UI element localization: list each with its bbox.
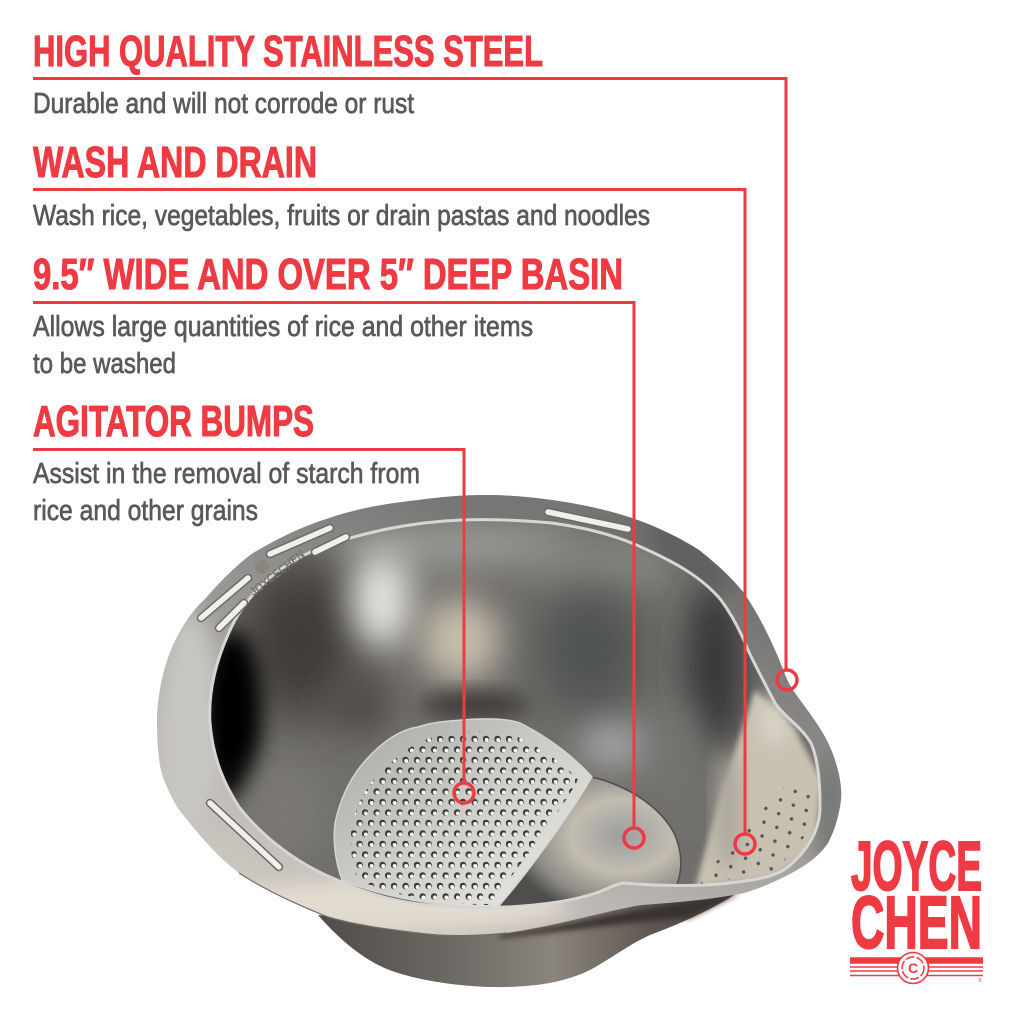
heading: HIGH QUALITY STAINLESS STEEL [33, 27, 543, 76]
description: Durable and will not corrode or rust [33, 88, 414, 120]
leader line [33, 302, 634, 828]
marker [454, 783, 474, 803]
logo stripes [850, 957, 983, 964]
marker [624, 828, 644, 848]
heading: 9.5″ WIDE AND OVER 5″ DEEP BASIN [33, 250, 623, 299]
inner rim highlight [210, 520, 820, 908]
callout 3: wide and deep basin [33, 250, 644, 848]
smooth basin lobe [498, 777, 681, 908]
description: Wash rice, vegetables, fruits or drain pastas and noodles [33, 200, 650, 232]
bowl underside [318, 888, 745, 987]
agitator bumps [351, 731, 578, 905]
heading: AGITATOR BUMPS [33, 397, 314, 446]
rim rivet [255, 560, 269, 574]
marker [735, 834, 755, 854]
rim engraving: JOYCECHEN [247, 547, 307, 599]
rim slots [201, 512, 628, 867]
callout 1: high quality stainless steel [33, 27, 797, 690]
rim edge shadow [239, 873, 507, 936]
bowl interior [200, 510, 830, 910]
spout wall [695, 690, 822, 888]
callout 2: wash and drain [33, 138, 755, 854]
agitator plate [334, 719, 592, 907]
description line 2: to be washed [33, 348, 176, 380]
leader line [33, 450, 464, 783]
description: Assist in the removal of starch from [33, 458, 420, 490]
bowl rim [150, 490, 850, 950]
logo: Joyce Chen [850, 827, 983, 984]
leader line [33, 78, 786, 670]
logo emblem: C [908, 960, 918, 976]
photo: stainless steel rice washing bowl [150, 490, 850, 987]
marker [777, 670, 797, 690]
registered mark: ® [978, 977, 982, 984]
heading: WASH AND DRAIN [33, 138, 317, 187]
logo emblem [898, 952, 928, 984]
leader line [33, 190, 745, 834]
callout 4: agitator bumps [33, 397, 474, 803]
colander holes [700, 786, 810, 884]
description: Allows large quantities of rice and other items [33, 311, 533, 343]
description line 2: rice and other grains [33, 495, 258, 527]
